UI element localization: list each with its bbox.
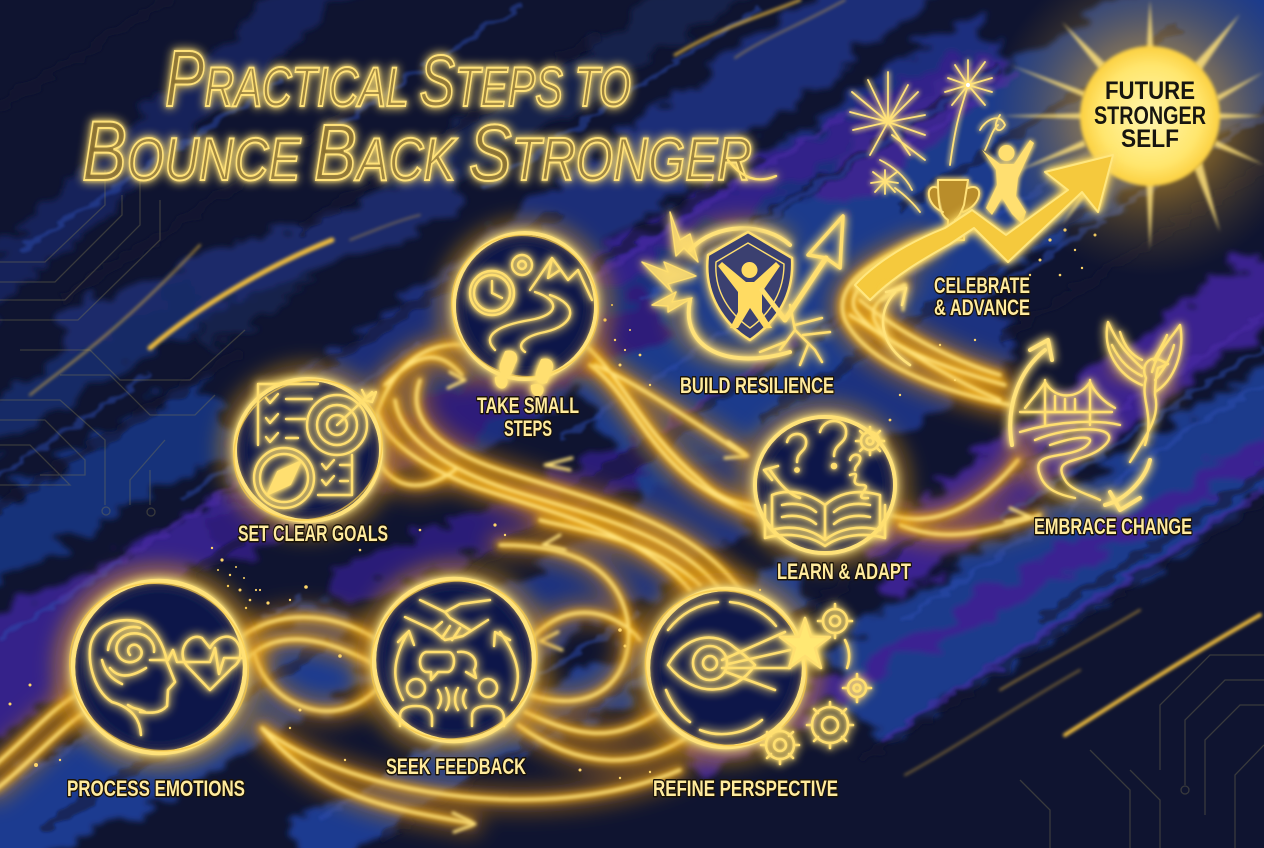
icon: fireworks, trophy and figure [850, 60, 1034, 240]
ring [208, 353, 408, 547]
sun text: STRONGER [1094, 102, 1206, 130]
ring [1010, 340, 1170, 510]
label: EMBRACE CHANGE [1034, 514, 1192, 539]
ring [345, 554, 563, 766]
icon: eye, star and gears [666, 602, 871, 764]
sun text: FUTURE [1105, 77, 1195, 105]
step: learn and adapt [749, 411, 911, 584]
step: refine perspective [617, 561, 871, 801]
label: LEARN & ADAPT [777, 559, 911, 584]
sun text [1094, 77, 1206, 153]
icon: head with spiral and heart [90, 620, 244, 735]
icon: bridge, river and phoenix [1020, 322, 1181, 500]
step: build resilience [642, 212, 843, 398]
label [477, 393, 579, 441]
label: SET CLEAR GOALS [238, 521, 388, 546]
label: REFINE PERSPECTIVE [653, 776, 838, 801]
label: SEEK FEEDBACK [386, 754, 526, 779]
step: take small steps [428, 211, 622, 441]
step: set clear goals [208, 353, 408, 547]
label: & ADVANCE [934, 295, 1030, 320]
path arrowheads [448, 285, 1030, 832]
ring [46, 558, 272, 776]
faint circuit traces [0, 170, 1264, 848]
label [934, 273, 1030, 320]
label: STEPS [504, 416, 552, 441]
icon: clock, mountain, road and footprints [470, 255, 592, 395]
ring [679, 227, 790, 359]
icon: handshake, speech bubbles, people [395, 600, 518, 726]
icon: shield, figure, arrow, lightning and roots [642, 212, 843, 365]
step: celebrate and advance [850, 60, 1113, 365]
step: process emotions [46, 558, 272, 801]
label: TAKE SMALL [477, 393, 579, 418]
icon: open book, question marks and gear [764, 421, 885, 546]
sun text: SELF [1121, 125, 1179, 153]
label: CELEBRATE [934, 273, 1030, 298]
icon: rising zigzag arrow [855, 155, 1113, 300]
step: embrace change [1010, 322, 1192, 539]
flowing golden path ribbons [0, 243, 1040, 832]
ring [749, 411, 901, 559]
step: seek feedback [345, 554, 563, 779]
sparkle particles [8, 228, 1096, 779]
sun disc [1080, 46, 1220, 186]
sun: future stronger self [990, 0, 1264, 276]
sun halo [990, 0, 1264, 276]
arrow: small return curve [883, 288, 910, 365]
sun rays [1000, 0, 1264, 250]
ring [428, 211, 622, 401]
icon: checklist, target and compass [254, 384, 376, 508]
title: PRACTICAL STEPS TO [165, 34, 631, 123]
title: BOUNCE BACK STRONGER [82, 104, 752, 198]
label: PROCESS EMOTIONS [67, 776, 245, 801]
ring [617, 561, 835, 775]
label: BUILD RESILIENCE [680, 373, 834, 398]
title [82, 34, 776, 198]
